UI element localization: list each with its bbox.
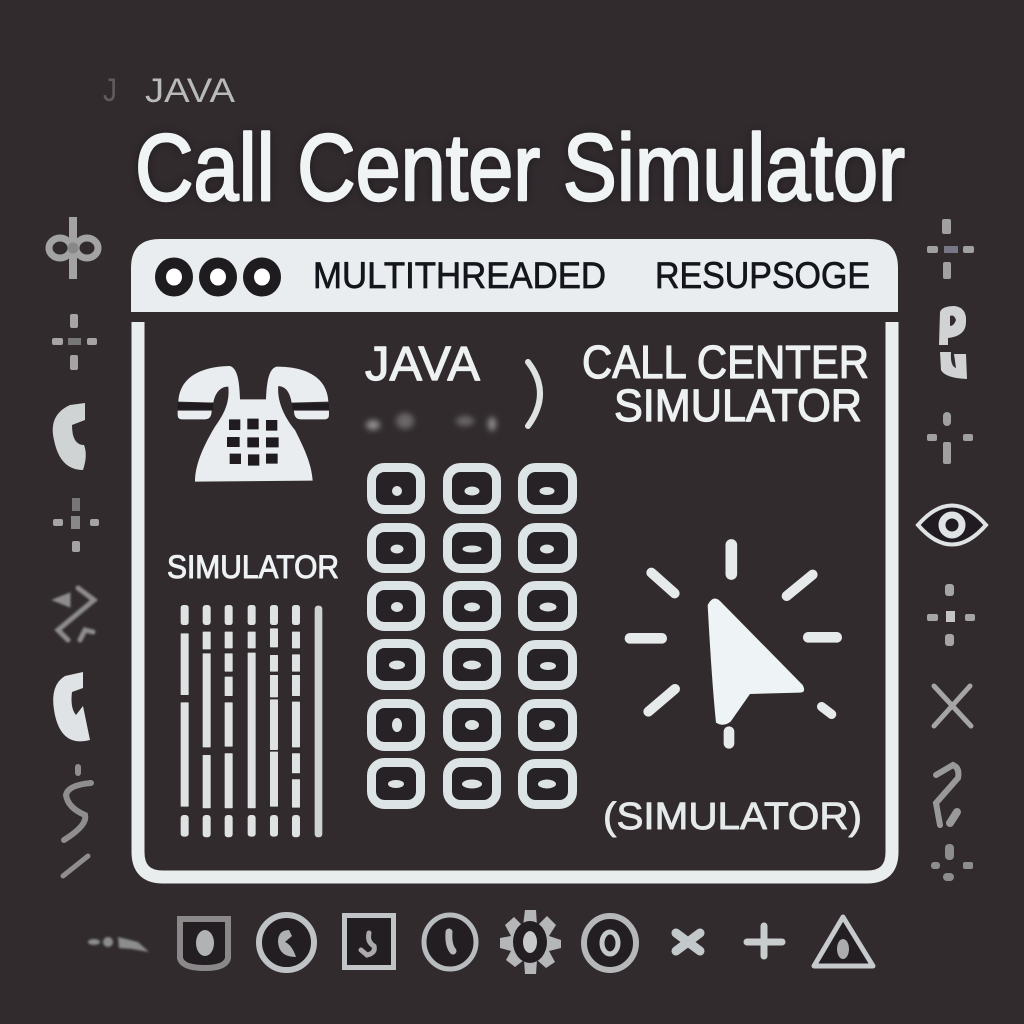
blurred ghost text	[366, 413, 496, 431]
icon: handset	[53, 403, 86, 470]
icon: plus marks	[52, 314, 97, 370]
title: Call Center Simulator	[135, 115, 905, 221]
icon: circle phone	[259, 915, 314, 970]
keypad tile outlines	[372, 468, 572, 804]
icon: plus marks	[927, 412, 973, 464]
text: (simulator): (SIMULATOR)	[603, 796, 862, 838]
icon: cross glyph	[676, 933, 700, 951]
text: call center simulator: CALL CENTER	[582, 336, 869, 388]
keypad grid	[372, 468, 572, 804]
small heading: JAVA: J	[103, 72, 117, 108]
closing bracket	[528, 362, 540, 426]
icon: question mark	[936, 765, 958, 825]
bottom icon row	[88, 910, 873, 974]
icon: square glyph	[344, 916, 394, 968]
text: JAVA: JAVA	[365, 338, 480, 391]
icon: knot	[49, 217, 98, 279]
title: Call Center Simulator	[135, 115, 905, 221]
icon: warning triangle	[814, 917, 873, 966]
icon: circle glyph	[424, 915, 476, 969]
panel: application window	[131, 239, 898, 877]
text: simulator label: SIMULATOR	[167, 549, 339, 585]
title bar label: response: RESUPSOGE	[655, 255, 870, 296]
icon: handset glyph	[939, 306, 967, 379]
window frame	[138, 322, 892, 877]
text: call center simulator: SIMULATOR	[614, 380, 862, 431]
right icon column	[918, 219, 986, 881]
small heading: JAVA	[103, 72, 235, 110]
icon: plus	[747, 926, 782, 956]
icon: plus marks	[931, 844, 973, 881]
window title bar	[131, 239, 898, 312]
chart: thread bars	[181, 605, 322, 837]
icon: plus marks	[927, 219, 974, 279]
title bar label: multithreaded: MULTITHREADED	[313, 255, 606, 296]
icon: handset	[53, 672, 90, 741]
icon: eye	[918, 506, 986, 544]
icon: squiggle	[63, 767, 91, 876]
icon: dashes	[88, 937, 149, 952]
icon: mouse cursor with click rays	[630, 545, 837, 743]
text: call center simulator	[582, 336, 869, 431]
window control dots	[160, 263, 276, 291]
icon: telephone	[178, 366, 329, 482]
icon: plus marks	[53, 498, 99, 552]
small heading: JAVA: JAVA	[145, 72, 235, 110]
icon: plus marks	[927, 584, 975, 646]
icon: gear	[500, 910, 561, 974]
keypad tile dots	[388, 486, 556, 788]
icon: shield square	[180, 919, 228, 968]
icon: cross	[934, 686, 971, 726]
icon: swirl arrows	[58, 588, 94, 640]
icon: target	[584, 916, 636, 970]
left icon column	[49, 217, 99, 876]
